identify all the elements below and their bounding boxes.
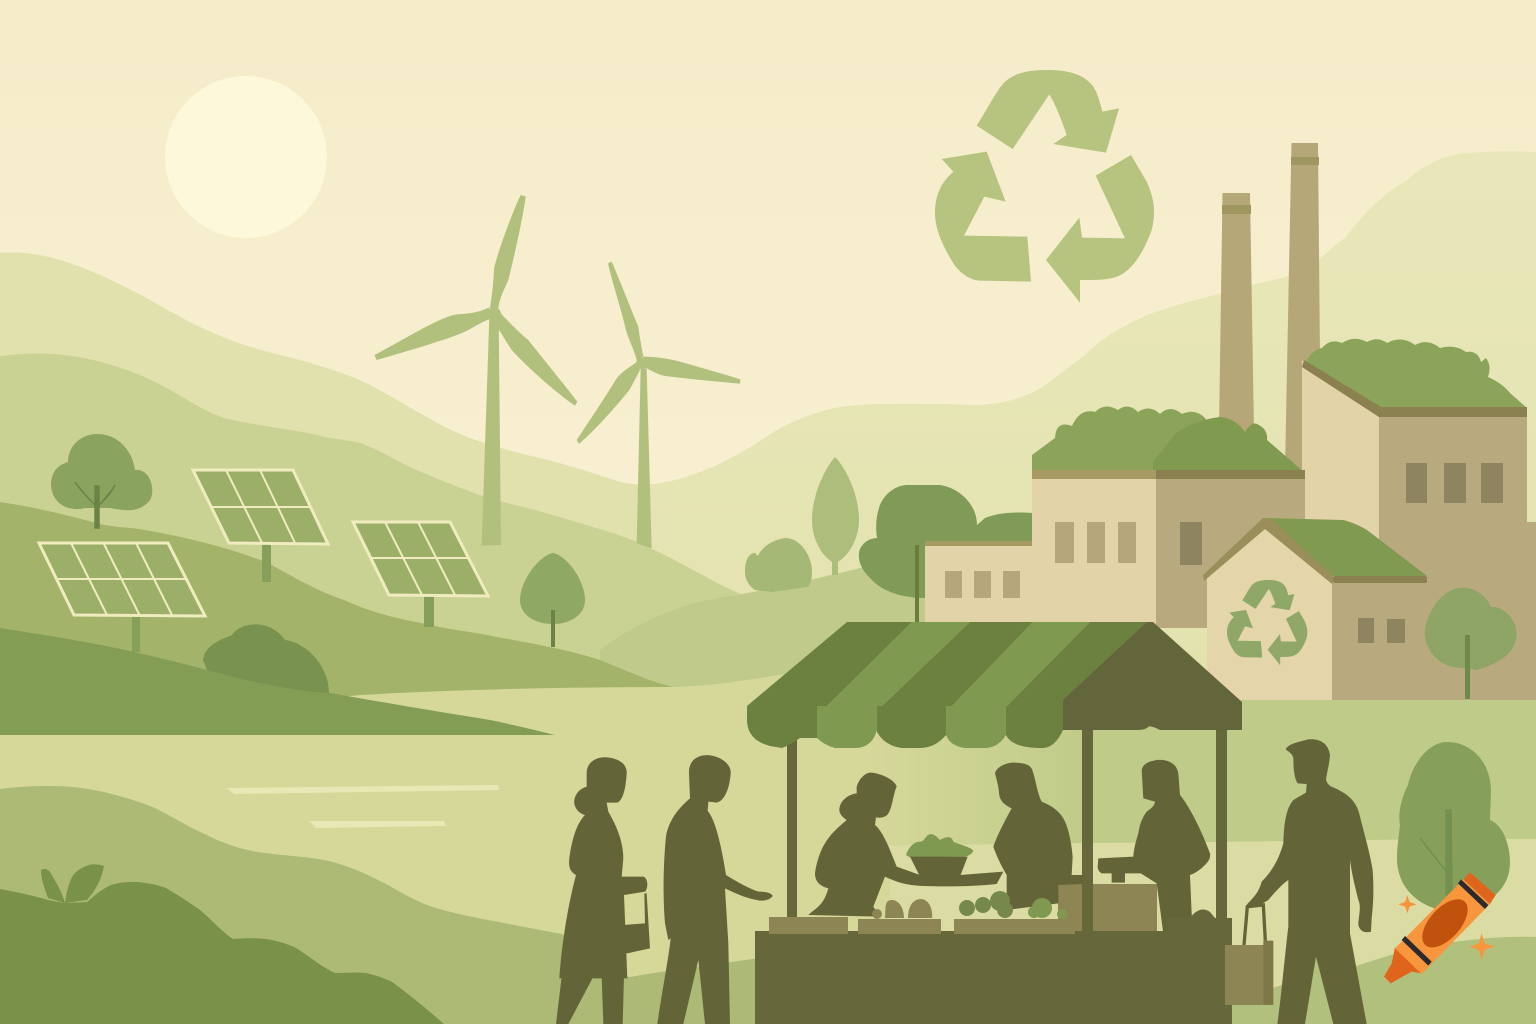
sparkles bbox=[1398, 895, 1495, 960]
house windows bbox=[1358, 618, 1405, 643]
wind turbine: right bbox=[577, 262, 740, 548]
foreground plant leaves bbox=[41, 864, 104, 903]
house roof strip bbox=[1333, 576, 1427, 583]
crates bbox=[769, 917, 1075, 934]
stall counter bbox=[755, 931, 1232, 1024]
front hill bbox=[0, 628, 555, 735]
green roof: middle building right bbox=[1153, 417, 1304, 472]
counter right lump bbox=[1167, 910, 1232, 935]
lower left hill bbox=[0, 786, 760, 1024]
roof edge: middle building bbox=[1032, 470, 1156, 479]
right meadow band bbox=[860, 700, 1536, 846]
tree: foreground right bbox=[1397, 742, 1510, 910]
lake ripples bbox=[226, 785, 499, 828]
house gable front bbox=[1207, 529, 1332, 700]
chimney: tall bbox=[1285, 143, 1321, 470]
solar panel 2 bbox=[193, 470, 328, 582]
crayon oval bbox=[1414, 891, 1476, 955]
lake bbox=[0, 670, 1536, 1024]
green roof: middle building left bbox=[1032, 406, 1240, 472]
canopy dark right roof bbox=[1063, 622, 1242, 730]
left middle hill bbox=[0, 354, 745, 700]
low factory building bbox=[915, 541, 1032, 630]
market stall bbox=[747, 622, 1242, 1024]
foreground dark hill bbox=[0, 882, 444, 1024]
stall crates box behind bbox=[1058, 884, 1157, 934]
solar panel 1 bbox=[39, 543, 205, 652]
produce: brown lumps bbox=[872, 899, 932, 919]
tall factory building bbox=[1302, 339, 1536, 700]
icon: crayon logo bbox=[1384, 872, 1496, 983]
person: shopper man right with bag bbox=[1225, 739, 1373, 1024]
produce: green lumps bbox=[959, 891, 1013, 918]
tree: beside house bbox=[1425, 588, 1517, 699]
house gable edge bbox=[1203, 518, 1334, 584]
canopy stripes bbox=[747, 622, 1242, 748]
shopper handbag bbox=[623, 893, 650, 953]
leg gap bbox=[1305, 957, 1333, 1024]
person: shopper woman bbox=[556, 757, 650, 1024]
icon: big recycling symbol bbox=[935, 70, 1154, 303]
crayon bands bbox=[1402, 879, 1488, 966]
tree: teardrop near turbine bbox=[520, 553, 585, 647]
tree: pale teardrop bbox=[812, 457, 859, 575]
crayon tip bbox=[1384, 947, 1422, 983]
sun bbox=[165, 76, 327, 238]
middle factory building bbox=[1032, 406, 1305, 628]
recycling house bbox=[1203, 518, 1442, 700]
person: seller two bbox=[993, 763, 1082, 910]
green roof: tall building bbox=[1306, 339, 1527, 408]
windows: tall building bbox=[1406, 463, 1503, 503]
person: seller three bbox=[1098, 760, 1210, 933]
far right hill bbox=[620, 151, 1536, 720]
tree: small bush tree bbox=[745, 538, 812, 592]
bush on front hill bbox=[203, 624, 329, 693]
crayon end cap bbox=[1463, 872, 1496, 904]
wind turbine: left bbox=[374, 195, 577, 546]
person: seller one bbox=[808, 773, 1003, 917]
left far hill bbox=[0, 253, 650, 700]
right meadow lighter path bbox=[890, 839, 1536, 990]
windows: middle building bbox=[1055, 522, 1136, 563]
person: shopper man left bbox=[657, 755, 773, 1024]
solar panel 3 bbox=[353, 522, 488, 627]
right middle hill bbox=[600, 530, 1100, 700]
bowl of produce bbox=[906, 834, 973, 877]
stall poles bbox=[787, 728, 1227, 938]
canopy valance scallops bbox=[747, 706, 817, 748]
lower right meadow bbox=[1230, 937, 1536, 1024]
crayon body bbox=[1395, 879, 1490, 974]
tree: left hill bbox=[51, 434, 152, 528]
tree: large bush behind buildings bbox=[859, 485, 1032, 605]
hill with solar panels bbox=[0, 502, 677, 710]
chimney: short bbox=[1219, 193, 1254, 432]
icon: small recycling symbol bbox=[1227, 580, 1307, 665]
roof edge: tall building bbox=[1302, 360, 1527, 417]
house green roof bbox=[1263, 518, 1427, 576]
shopping bag bbox=[1225, 905, 1273, 1005]
